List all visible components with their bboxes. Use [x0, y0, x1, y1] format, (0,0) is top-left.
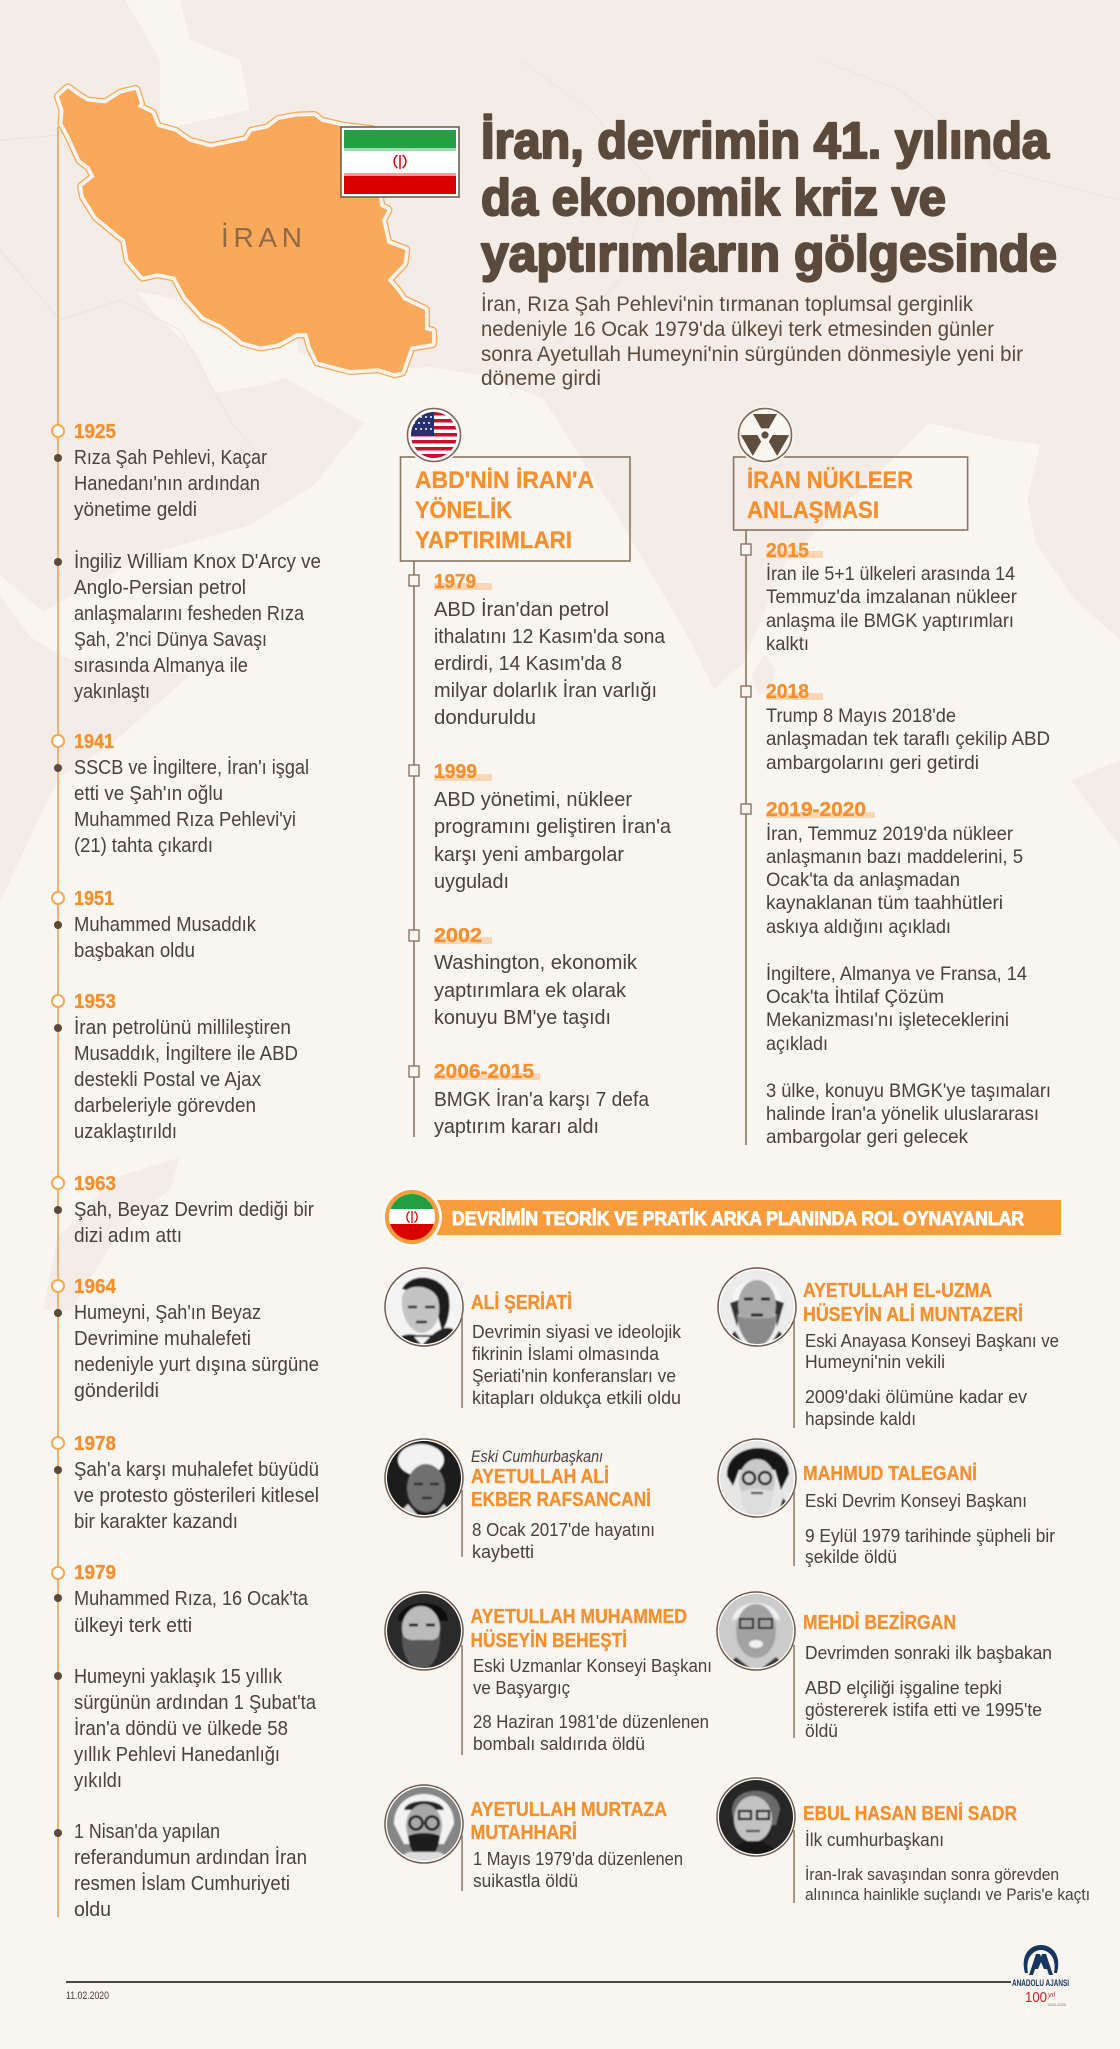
section header: people	[385, 1190, 1061, 1244]
entry 2019-2020: askıya aldığını açıkladı	[766, 916, 951, 938]
year 1953: darbeleriyle görevden	[74, 1095, 256, 1117]
year 1979: İran'a döndü ve ülkede 58	[74, 1717, 288, 1740]
entry 2018: anlaşmadan tek taraflı çekilip ABD	[766, 728, 1050, 750]
heading box: nuclear deal	[734, 457, 968, 530]
person: Beheşti: ve Başyargıç	[473, 1677, 570, 1698]
person: Rafsancani: kaybetti	[472, 1541, 534, 1562]
logo: Anadolu Ajansı	[1012, 1945, 1069, 2007]
section header: people: DEVRİMİN TEORİK VE PRATİK ARKA PLANINDA ROL OYNAYANLAR	[452, 1209, 1024, 1230]
portrait	[716, 1591, 796, 1671]
year 1953: 1953	[74, 991, 116, 1013]
title: İran, devrimin 41. yılında	[481, 112, 1050, 169]
person: Bezirgan: öldü	[805, 1720, 838, 1741]
year 1964: nedeniyle yurt dışına sürgüne	[74, 1354, 319, 1376]
year 1979: resmen İslam Cumhuriyeti	[74, 1872, 290, 1895]
portrait	[384, 1784, 464, 1864]
year 1925: Rıza Şah Pehlevi, Kaçar	[74, 447, 267, 469]
year 1978: Şah'a karşı muhalefet büyüdü	[74, 1459, 319, 1481]
year 1953: uzaklaştırıldı	[74, 1121, 177, 1143]
entry 1979: donduruldu	[434, 706, 536, 729]
year 1953	[52, 991, 298, 1143]
portrait	[716, 1777, 796, 1857]
year 1925: Anglo-Persian petrol	[74, 577, 246, 599]
entry 2019-2020: İngiltere, Almanya ve Fransa, 14	[766, 962, 1027, 985]
person: Talegani: şekilde öldü	[805, 1546, 897, 1567]
person: Rafsancani	[384, 1438, 655, 1562]
year 1941: Muhammed Rıza Pehlevi'yi	[74, 809, 296, 831]
year 1979: 1 Nisan'da yapılan	[74, 1821, 220, 1843]
person: Ali Şeriati	[384, 1267, 682, 1408]
portrait	[384, 1438, 464, 1518]
person: Rafsancani: EKBER RAFSANCANİ	[471, 1488, 651, 1511]
subtitle: İran, Rıza Şah Pehlevi'nin tırmanan toplumsal gerginlik	[481, 293, 973, 316]
year 1978: 1978	[74, 1433, 116, 1455]
entry 2002	[409, 925, 638, 1029]
year 1963: dizi adım attı	[74, 1225, 182, 1247]
person: Bezirgan: MEHDİ BEZİRGAN	[803, 1611, 956, 1634]
entry 2015	[741, 540, 1017, 655]
year 1941: etti ve Şah'ın oğlu	[74, 783, 223, 805]
entry 1999: ABD yönetimi, nükleer	[434, 788, 632, 811]
year 1979: Muhammed Rıza, 16 Ocak'ta	[74, 1588, 309, 1610]
year 1941: SSCB ve İngiltere, İran'ı işgal	[74, 756, 309, 779]
footer: 11.02.2020	[66, 1990, 109, 2002]
entry 2015: kalktı	[766, 633, 809, 655]
year 1964: 1964	[74, 1276, 117, 1298]
subtitle: nedeniyle 16 Ocak 1979'da ülkeyi terk etmesinden günler	[481, 318, 994, 341]
entry 2006-2015: BMGK İran'a karşı 7 defa	[434, 1088, 650, 1111]
icon: radiation	[736, 406, 794, 464]
entry 2019-2020: 3 ülke, konuyu BMGK'ye taşımaları	[766, 1080, 1051, 1102]
heading box: US sanctions: YAPTIRIMLARI	[415, 527, 572, 554]
person: Beni Sadr: İran-Irak savaşından sonra görevden	[805, 1865, 1059, 1884]
entry 2002: yaptırımlara ek olarak	[434, 979, 627, 1002]
year 1953: destekli Postal ve Ajax	[74, 1069, 261, 1091]
subtitle: döneme girdi	[481, 367, 601, 390]
panel: US sanctions	[400, 406, 672, 1138]
heading box: US sanctions: ABD'NİN İRAN'A	[415, 467, 594, 494]
year 1925: Şah, 2'nci Dünya Savaşı	[74, 629, 267, 651]
year 1979	[52, 1562, 317, 1921]
year 1925: yönetime geldi	[74, 499, 197, 521]
year 1951: Muhammed Musaddık	[74, 914, 257, 936]
person: Talegani: MAHMUD TALEGANİ	[803, 1462, 977, 1485]
person: Bezirgan: göstererek istifa etti ve 1995'te	[805, 1699, 1042, 1720]
year 1964: Humeyni, Şah'ın Beyaz	[74, 1302, 261, 1324]
year 1979: ülkeyi terk etti	[74, 1615, 192, 1637]
person: Beni Sadr: alınınca hainlikle suçlandı ve Paris'e kaçtı	[805, 1885, 1090, 1904]
year 1964: gönderildi	[74, 1380, 159, 1402]
background map	[0, 0, 1120, 1310]
portrait	[384, 1267, 464, 1347]
person: Talegani: 9 Eylül 1979 tarihinde şüpheli bir	[805, 1525, 1055, 1546]
entry 2006-2015: 2006-2015	[434, 1061, 534, 1083]
entry 1979	[409, 571, 666, 729]
year 1964: Devrimine muhalefeti	[74, 1328, 251, 1350]
person: Muntazeri: AYETULLAH EL-UZMA	[803, 1279, 992, 1302]
person: Muntazeri: 2009'daki ölümüne kadar ev	[805, 1386, 1028, 1407]
entry 2018	[741, 681, 1050, 774]
entry 1999: karşı yeni ambargolar	[434, 843, 624, 866]
person: Muntazeri: Eski Anayasa Konseyi Başkanı ve	[805, 1330, 1059, 1351]
heading box: nuclear deal: İRAN NÜKLEER	[747, 467, 913, 494]
person: Mutahhari	[384, 1784, 683, 1891]
person: Talegani	[717, 1438, 1055, 1567]
heading box: US sanctions: YÖNELİK	[415, 497, 513, 524]
person: Beheşti: HÜSEYİN BEHEŞTİ	[470, 1629, 627, 1652]
subtitle	[481, 293, 1023, 390]
entry 2019-2020: Mekanizması'nı işleteceklerini	[766, 1009, 1009, 1031]
year 1979: yıllık Pehlevi Hanedanlığı	[74, 1744, 280, 1766]
entry 1999: 1999	[434, 761, 477, 783]
year 1979: yıkıldı	[74, 1770, 122, 1792]
year 1979: referandumun ardından İran	[74, 1846, 307, 1869]
logo: Anadolu Ajansı: 1920-2020	[1047, 2002, 1067, 2007]
entry 2019-2020: 2019-2020	[766, 799, 866, 821]
entry 2019-2020: kaynaklanan tüm taahhütleri	[766, 892, 1003, 914]
person: Muntazeri	[717, 1267, 1059, 1429]
person: Rafsancani: AYETULLAH ALİ	[471, 1465, 609, 1488]
entry 2019-2020	[741, 799, 1051, 1148]
timeline: Iran history	[52, 127, 321, 1921]
year 1979: 1979	[74, 1562, 116, 1584]
person: Ali Şeriati: Şeriati'nin konferansları ve	[472, 1365, 676, 1386]
year 1925: İngiliz William Knox D'Arcy ve	[74, 550, 321, 573]
portrait	[384, 1591, 464, 1671]
entry 2018: Trump 8 Mayıs 2018'de	[766, 705, 956, 727]
heading box: US sanctions	[400, 457, 630, 561]
subtitle: sonra Ayetullah Humeyni'nin sürgünden dönmesiyle yeni bir	[481, 343, 1023, 366]
portrait	[717, 1267, 797, 1347]
title: da ekonomik kriz ve	[481, 169, 946, 226]
person: Bezirgan: Devrimden sonraki ilk başbakan	[805, 1642, 1052, 1663]
year 1953: Musaddık, İngiltere ile ABD	[74, 1042, 298, 1065]
person: Mutahhari: MUTAHHARİ	[470, 1821, 577, 1844]
icon: Iran flag	[341, 127, 459, 197]
year 1941: (21) tahta çıkardı	[74, 835, 213, 857]
year 1963: 1963	[74, 1173, 116, 1195]
heading box: nuclear deal: ANLAŞMASI	[747, 497, 879, 524]
icon: US flag	[406, 408, 462, 462]
entry 1999: programını geliştiren İran'a	[434, 815, 672, 838]
entry 2002: Washington, ekonomik	[434, 951, 638, 974]
person: Ali Şeriati: Devrimin siyasi ve ideolojik	[472, 1321, 682, 1342]
person: Rafsancani: Eski Cumhurbaşkanı	[471, 1448, 603, 1466]
person: Beni Sadr: EBUL HASAN BENİ SADR	[803, 1802, 1017, 1825]
year 1953: İran petrolünü millileştiren	[74, 1016, 291, 1039]
person: Ali Şeriati: kitapları oldukça etkili oldu	[472, 1387, 681, 1408]
entry 2015: anlaşma ile BMGK yaptırımları	[766, 610, 1014, 632]
year 1951	[52, 888, 257, 962]
entry 2019-2020: ambargolar geri gelecek	[766, 1126, 968, 1148]
person: Rafsancani: 8 Ocak 2017'de hayatını	[472, 1519, 655, 1540]
person: Muntazeri: Humeyni'nin vekili	[805, 1351, 945, 1372]
entry 2006-2015	[409, 1061, 650, 1138]
year 1941: 1941	[74, 731, 114, 753]
entry 2018: 2018	[766, 681, 809, 703]
entry 2015: 2015	[766, 540, 809, 562]
entry 2015: Temmuz'da imzalanan nükleer	[766, 586, 1017, 608]
person: Mutahhari: AYETULLAH MURTAZA	[470, 1798, 667, 1821]
person: Mutahhari: 1 Mayıs 1979'da düzenlenen	[473, 1848, 683, 1869]
entry 1999	[409, 761, 672, 893]
map of Iran: İRAN	[221, 222, 302, 253]
entry 2018: ambargolarını geri getirdi	[766, 752, 979, 774]
year 1951: başbakan oldu	[74, 940, 195, 962]
person: Talegani: Eski Devrim Konseyi Başkanı	[805, 1490, 1027, 1511]
year 1978: ve protesto gösterileri kitlesel	[74, 1485, 319, 1507]
year 1964	[52, 1276, 319, 1402]
year 1925: anlaşmalarını fesheden Rıza	[74, 603, 305, 625]
year 1925: Hanedanı'nın ardından	[74, 473, 260, 495]
person: Bezirgan	[716, 1591, 1052, 1741]
person: Beheşti: bombalı saldırıda öldü	[473, 1733, 645, 1754]
logo: Anadolu Ajansı: 100	[1025, 1989, 1047, 2006]
person: Beni Sadr	[716, 1777, 1090, 1904]
entry 2019-2020: açıkladı	[766, 1033, 828, 1055]
person: Bezirgan: ABD elçiliği işgaline tepki	[805, 1677, 1002, 1698]
year 1979: Humeyni yaklaşık 15 yıllık	[74, 1666, 283, 1688]
entry 2015: İran ile 5+1 ülkeleri arasında 14	[766, 562, 1015, 585]
person: Beheşti: 28 Haziran 1981'de düzenlenen	[473, 1711, 709, 1732]
entry 2019-2020: anlaşmanın bazı maddelerini, 5	[766, 846, 1023, 868]
panel: nuclear deal	[734, 406, 1051, 1148]
year 1963: Şah, Beyaz Devrim dediği bir	[74, 1199, 314, 1221]
portrait	[717, 1438, 797, 1518]
year 1925: 1925	[74, 421, 116, 443]
person: Beheşti: AYETULLAH MUHAMMED	[470, 1605, 687, 1628]
logo: Anadolu Ajansı: ANADOLU AJANSI	[1012, 1978, 1069, 1988]
year 1941	[52, 731, 309, 857]
entry 2002: 2002	[434, 925, 482, 947]
entry 2019-2020: İran, Temmuz 2019'da nükleer	[766, 822, 1013, 845]
entry 1999: uyguladı	[434, 870, 509, 893]
person: Ali Şeriati: ALİ ŞERİATİ	[471, 1291, 572, 1314]
person: Beni Sadr: İlk cumhurbaşkanı	[805, 1829, 944, 1850]
person: Beheşti: Eski Uzmanlar Konseyi Başkanı	[473, 1655, 712, 1676]
entry 1979: milyar dolarlık İran varlığı	[434, 679, 657, 702]
person: Muntazeri: hapsinde kaldı	[805, 1408, 916, 1429]
person: Ali Şeriati: fikrinin İslami olmasında	[472, 1343, 660, 1364]
year 1951: 1951	[74, 888, 114, 910]
year 1925	[52, 421, 321, 703]
entry 2006-2015: yaptırım kararı aldı	[434, 1115, 599, 1138]
logo: Anadolu Ajansı: yıl	[1047, 1992, 1055, 1999]
entry 1979: 1979	[434, 571, 476, 593]
year 1979: sürgünün ardından 1 Şubat'ta	[74, 1692, 317, 1714]
year 1978	[52, 1433, 319, 1533]
entry 1979: erdirdi, 14 Kasım'da 8	[434, 652, 622, 675]
entry 2019-2020: Ocak'ta da anlaşmadan	[766, 869, 960, 891]
person: Beheşti	[384, 1591, 712, 1755]
map of Iran	[59, 88, 432, 373]
title: yaptırımların gölgesinde	[481, 225, 1057, 282]
entry 2019-2020: Ocak'ta İhtilaf Çözüm	[766, 985, 944, 1008]
year 1925: sırasında Almanya ile	[74, 655, 248, 677]
year 1925: yakınlaştı	[74, 681, 150, 703]
title	[481, 112, 1057, 282]
year 1979: oldu	[74, 1899, 111, 1921]
year 1978: bir karakter kazandı	[74, 1511, 238, 1533]
person: Muntazeri: HÜSEYİN ALİ MUNTAZERİ	[803, 1303, 1023, 1326]
person: Mutahhari: suikastla öldü	[473, 1870, 578, 1891]
entry 2019-2020: halinde İran'a yönelik uluslararası	[766, 1102, 1039, 1125]
entry 2002: konuyu BM'ye taşıdı	[434, 1006, 611, 1029]
entry 1979: ABD İran'dan petrol	[434, 598, 609, 621]
entry 1979: ithalatını 12 Kasım'da sona	[434, 625, 666, 648]
year 1963	[52, 1173, 314, 1247]
